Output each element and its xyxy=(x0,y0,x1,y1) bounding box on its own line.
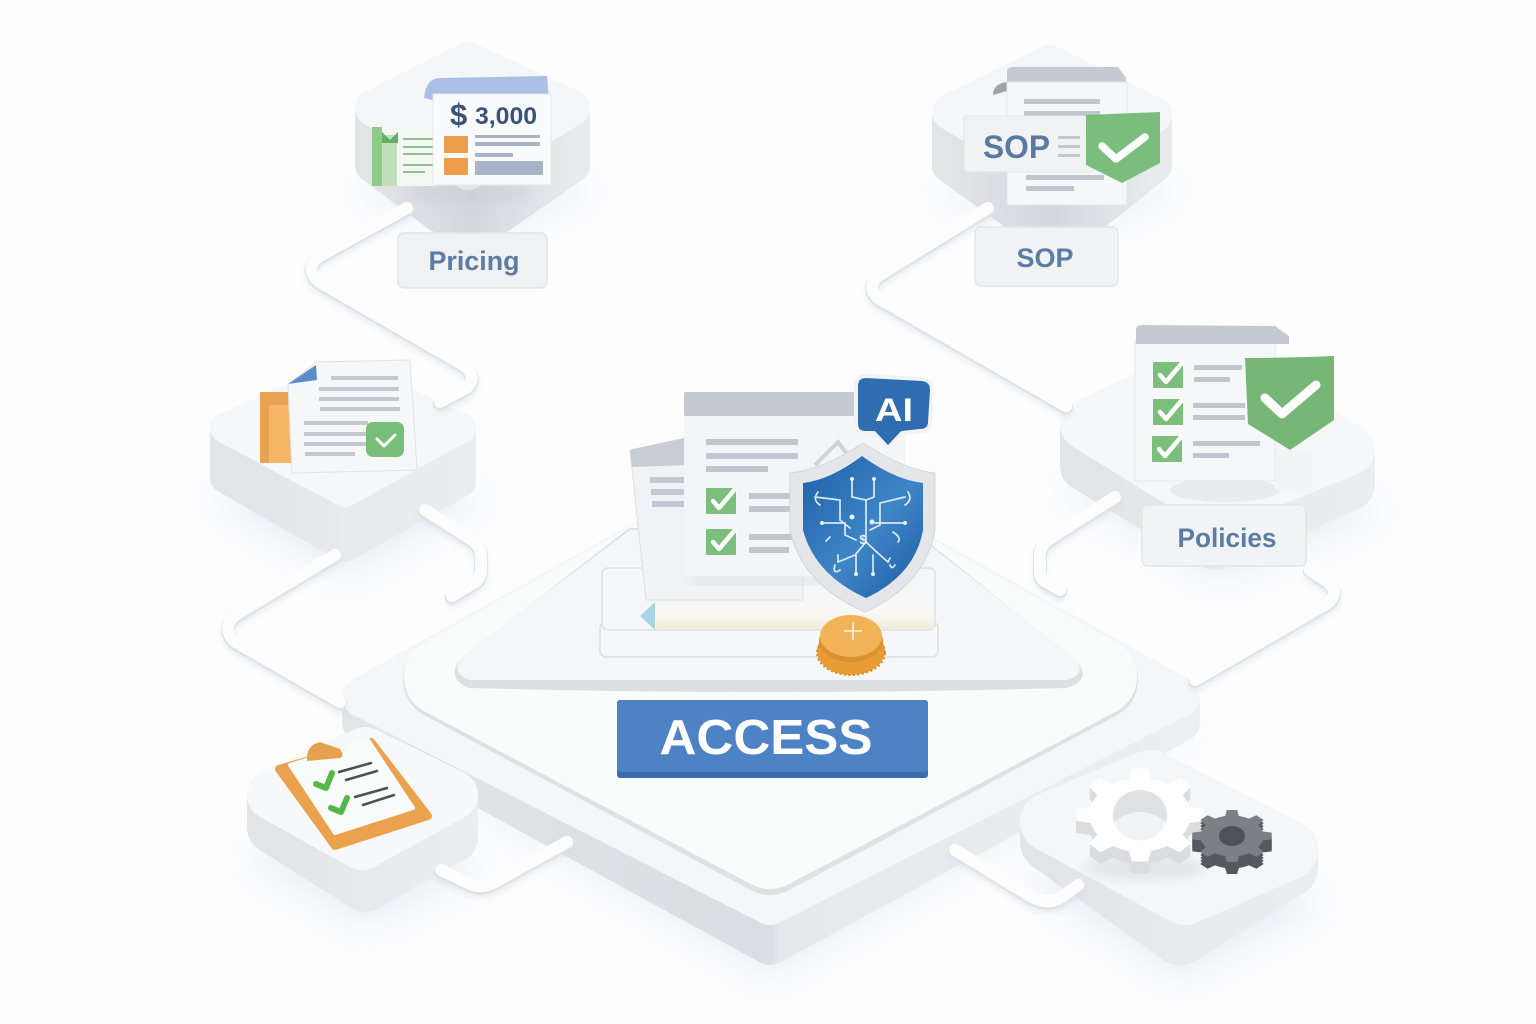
policies sheet xyxy=(1135,325,1313,492)
platform: contract block xyxy=(225,375,461,547)
green check badge xyxy=(366,422,404,457)
SOP card: SOP xyxy=(983,129,1050,165)
list lines xyxy=(339,763,394,805)
label: Policies: Policies xyxy=(1178,523,1276,553)
small dark gear xyxy=(1192,810,1272,874)
icon: pricing documents xyxy=(372,76,551,186)
price sheet: $ xyxy=(450,97,467,132)
icon: SOP documents xyxy=(964,67,1160,205)
orange folder xyxy=(260,392,292,463)
main platform xyxy=(362,470,1180,945)
access banner xyxy=(617,700,928,778)
label: Policies xyxy=(1142,505,1306,566)
access banner: ACCESS xyxy=(660,711,872,765)
main document xyxy=(684,392,905,584)
inner tier xyxy=(443,495,1098,855)
ground shadows xyxy=(215,160,1380,978)
orange board xyxy=(279,742,428,846)
icon: contract document xyxy=(260,360,417,473)
green shield check xyxy=(1086,112,1160,183)
icon: settings gears xyxy=(1076,768,1272,880)
label: SOP: SOP xyxy=(1016,243,1074,273)
SOP card xyxy=(964,116,1094,172)
icon: policies document xyxy=(1135,325,1334,502)
top tier xyxy=(457,530,1081,690)
price sheet xyxy=(424,76,551,185)
base plates xyxy=(600,568,938,657)
central icon stack xyxy=(600,376,938,675)
large white gear xyxy=(1076,768,1205,880)
platform: clipboard block xyxy=(272,752,453,887)
shield with circuit: $ xyxy=(859,532,867,547)
paper xyxy=(290,740,413,833)
rear document xyxy=(630,437,803,600)
icon: clipboard xyxy=(279,740,428,846)
connector tubes xyxy=(228,208,1334,907)
label: Pricing: Pricing xyxy=(428,246,520,276)
SOP document xyxy=(993,67,1127,205)
clip xyxy=(307,742,342,761)
AI speech bubble xyxy=(856,376,932,448)
green shield check xyxy=(1245,356,1334,450)
platform: pricing block xyxy=(373,60,572,215)
AI speech bubble: AI xyxy=(875,392,913,428)
check marks xyxy=(316,773,347,812)
green checklist xyxy=(372,127,436,186)
coin xyxy=(817,615,885,675)
platform: gears block xyxy=(1050,780,1288,935)
platform: policies block xyxy=(1085,362,1350,545)
document sheet xyxy=(288,360,417,473)
price sheet: 3,000 xyxy=(475,103,537,130)
platform: SOP block xyxy=(950,63,1154,212)
label: Pricing xyxy=(398,233,547,288)
label: SOP xyxy=(975,227,1118,286)
shield with circuit xyxy=(790,443,935,612)
